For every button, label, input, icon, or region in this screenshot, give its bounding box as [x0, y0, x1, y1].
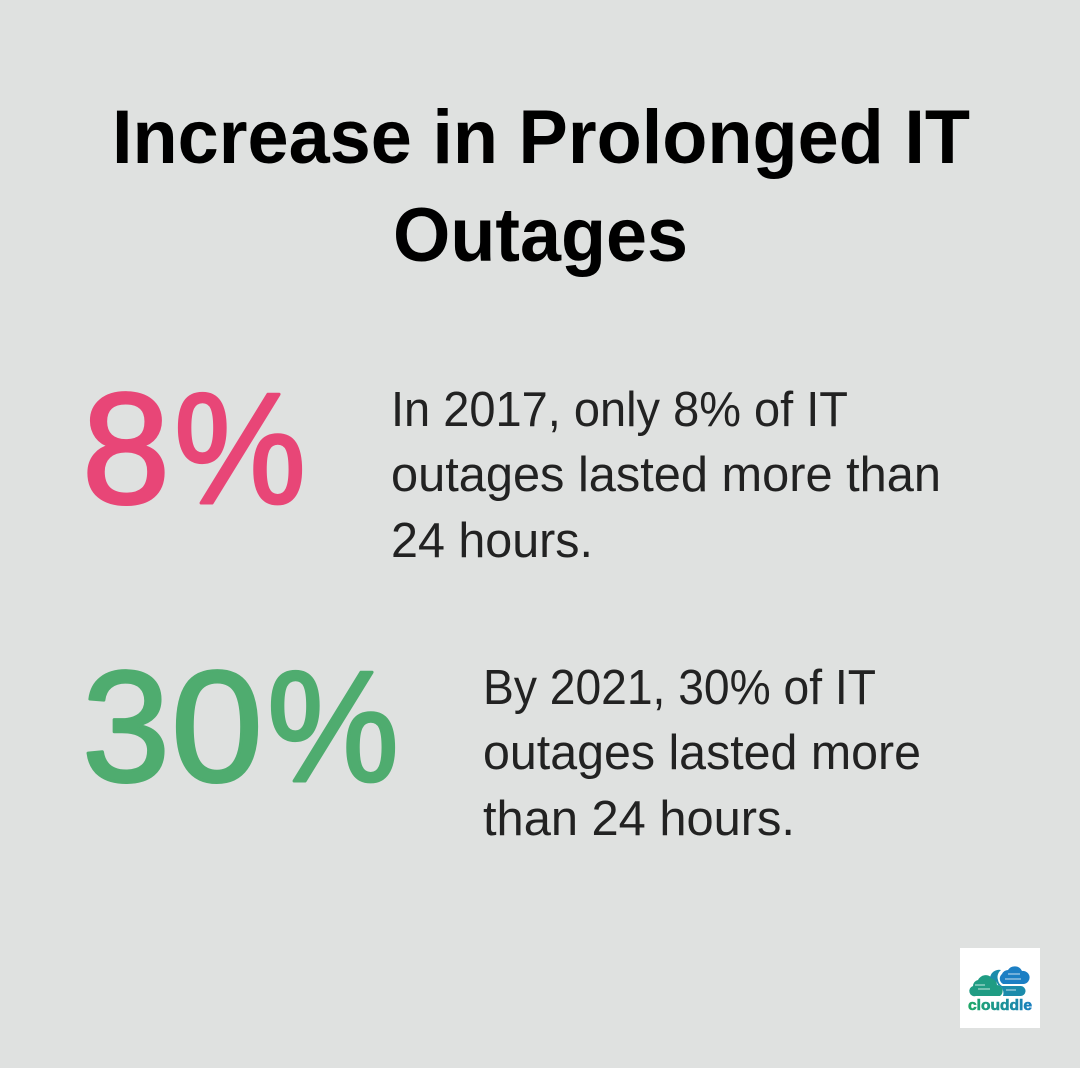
title: Outages	[393, 193, 688, 278]
title: Increase in Prolonged IT	[112, 95, 970, 180]
text block: 2017 description: outages lasted more than	[391, 448, 941, 502]
text block: 2017 description	[391, 383, 941, 568]
text block: 2017 description: In 2017, only 8% of IT	[391, 383, 848, 437]
stat: 30%: %	[267, 639, 399, 815]
text block: 2021 description: By 2021, 30% of IT	[483, 661, 876, 715]
stat: 30%	[82, 639, 399, 815]
stat: 8%: 8	[82, 361, 170, 537]
stat: 30%: 3	[82, 639, 170, 815]
stat: 8%: %	[174, 361, 306, 537]
text block: 2021 description: than 24 hours.	[483, 792, 795, 846]
text block: 2021 description	[483, 661, 921, 846]
text block: 2021 description: outages lasted more	[483, 726, 921, 780]
text block: 2017 description: 24 hours.	[391, 514, 593, 568]
logo: clouddle	[960, 948, 1040, 1028]
title	[112, 95, 970, 278]
icon: clouds	[969, 966, 1030, 996]
logo wordmark: clouddle	[968, 997, 1032, 1014]
stat: 8%	[82, 361, 306, 537]
stat: 30%: 0	[171, 639, 263, 815]
